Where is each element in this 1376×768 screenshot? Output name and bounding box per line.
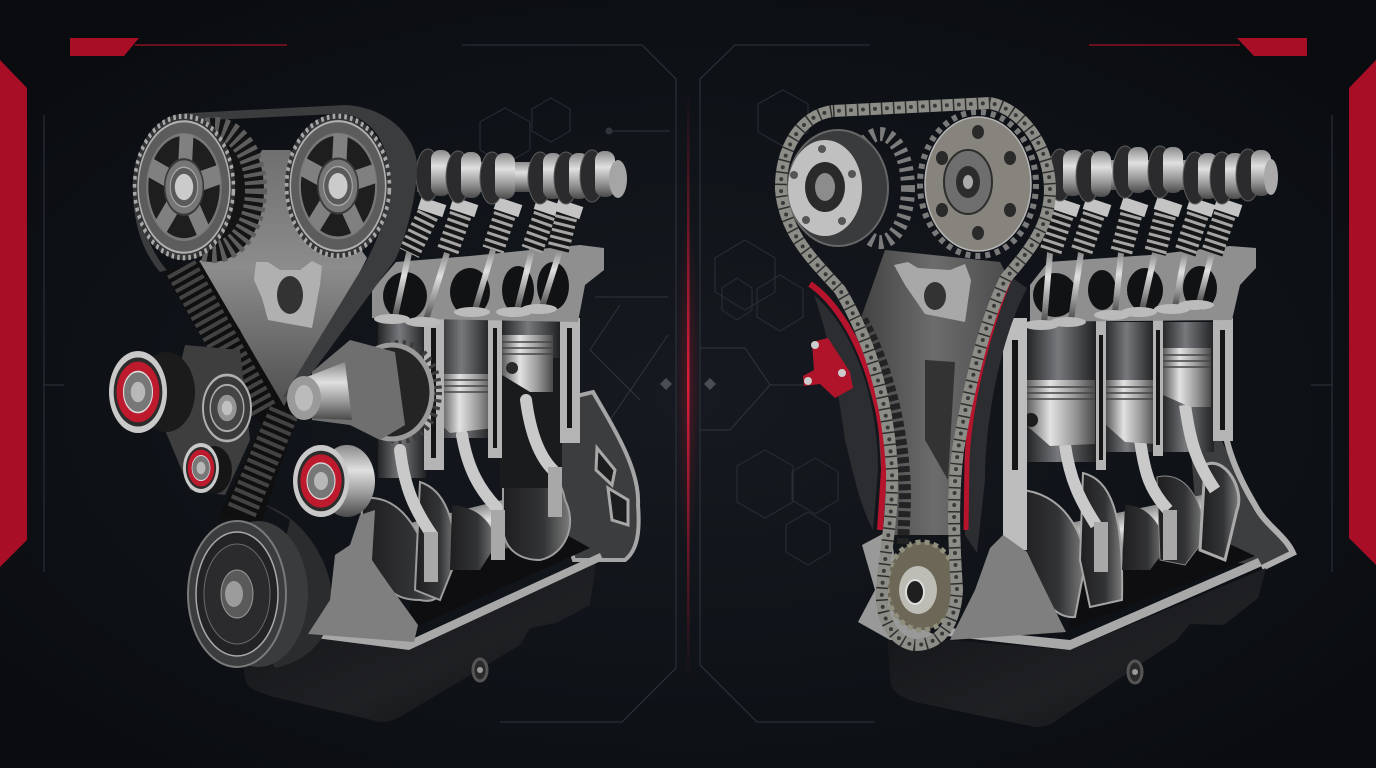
camshaft sprocket left	[130, 109, 238, 265]
side HUD lines	[44, 115, 1332, 572]
red tensioner	[803, 338, 853, 398]
chain guide bodies	[814, 278, 1027, 553]
left red guide	[810, 284, 884, 530]
right HUD frame	[700, 45, 875, 722]
pistons	[441, 335, 553, 433]
phaser plate	[788, 140, 862, 236]
centre red divider	[676, 90, 700, 680]
rear plate rim	[1224, 402, 1293, 568]
inner dark chain strand	[862, 320, 905, 545]
rear depth of camshaft sprocket	[160, 118, 264, 262]
head ports	[383, 262, 569, 320]
hexagon background pattern left panel	[480, 98, 670, 420]
left HUD frame	[462, 45, 676, 722]
bracket hole	[924, 282, 946, 310]
crank well	[405, 520, 590, 632]
rear plate	[1190, 400, 1293, 565]
drain plug	[1128, 661, 1142, 683]
pan flange	[300, 553, 603, 650]
belt smooth outer run	[133, 105, 417, 398]
crankshaft pulley	[188, 521, 308, 667]
cam gear right	[920, 112, 1036, 256]
connecting rods	[1065, 405, 1215, 572]
right red edge bar	[1349, 60, 1376, 565]
cylinder partitions	[1003, 318, 1233, 550]
phaser rear ring	[788, 130, 888, 246]
front cover	[198, 150, 367, 412]
idler bracket	[165, 345, 250, 495]
front bracket	[308, 510, 418, 642]
water pump	[287, 340, 436, 440]
mounting bracket	[254, 261, 322, 328]
timing chain	[781, 103, 1050, 645]
front lower bracket	[950, 535, 1066, 640]
valves and springs	[374, 201, 571, 327]
small red idler	[183, 443, 232, 494]
rear plate	[545, 392, 639, 560]
camshaft	[416, 149, 627, 204]
mounting bracket hole	[277, 276, 303, 314]
oil pan	[887, 568, 1266, 727]
crankshaft	[362, 467, 570, 601]
toothed belt band	[162, 262, 306, 522]
pan flange	[947, 558, 1262, 650]
camshaft	[1048, 146, 1278, 204]
camshaft sprocket right	[281, 109, 395, 263]
cylinder bays	[1027, 322, 1214, 462]
top left red tab with line	[70, 38, 287, 56]
top right red tab with line	[1089, 38, 1307, 56]
lower idler with red bearing	[293, 445, 375, 517]
drain plug	[473, 659, 487, 681]
head ports	[1033, 266, 1217, 317]
mounting bracket	[894, 262, 971, 322]
right red guide	[966, 278, 1010, 530]
black strap around crank	[262, 505, 332, 668]
crankshaft	[1017, 463, 1239, 617]
cylinder partitions	[424, 318, 580, 470]
oil pan	[240, 562, 596, 722]
cylinder head	[372, 245, 604, 322]
cylinder head	[1030, 246, 1256, 322]
engine left: timing belt	[109, 105, 639, 722]
tensioner idler with red bearing	[109, 351, 195, 433]
rear plate ports	[596, 448, 628, 525]
centre diamond markers	[660, 378, 716, 390]
front cover	[855, 250, 1012, 535]
pistons	[1024, 348, 1211, 446]
hexagon background pattern right panel	[700, 90, 838, 565]
base lug	[858, 530, 945, 640]
cover recess	[925, 360, 955, 480]
rear depth of cam gear	[852, 134, 908, 242]
connecting rods	[400, 400, 562, 582]
crank well	[1068, 530, 1255, 630]
engine right: timing chain	[781, 103, 1293, 727]
left red edge bar	[0, 60, 27, 567]
plain idler	[203, 375, 251, 441]
valves and springs	[1023, 201, 1230, 330]
cylinder bays	[378, 318, 562, 488]
crank sprocket	[887, 542, 957, 630]
